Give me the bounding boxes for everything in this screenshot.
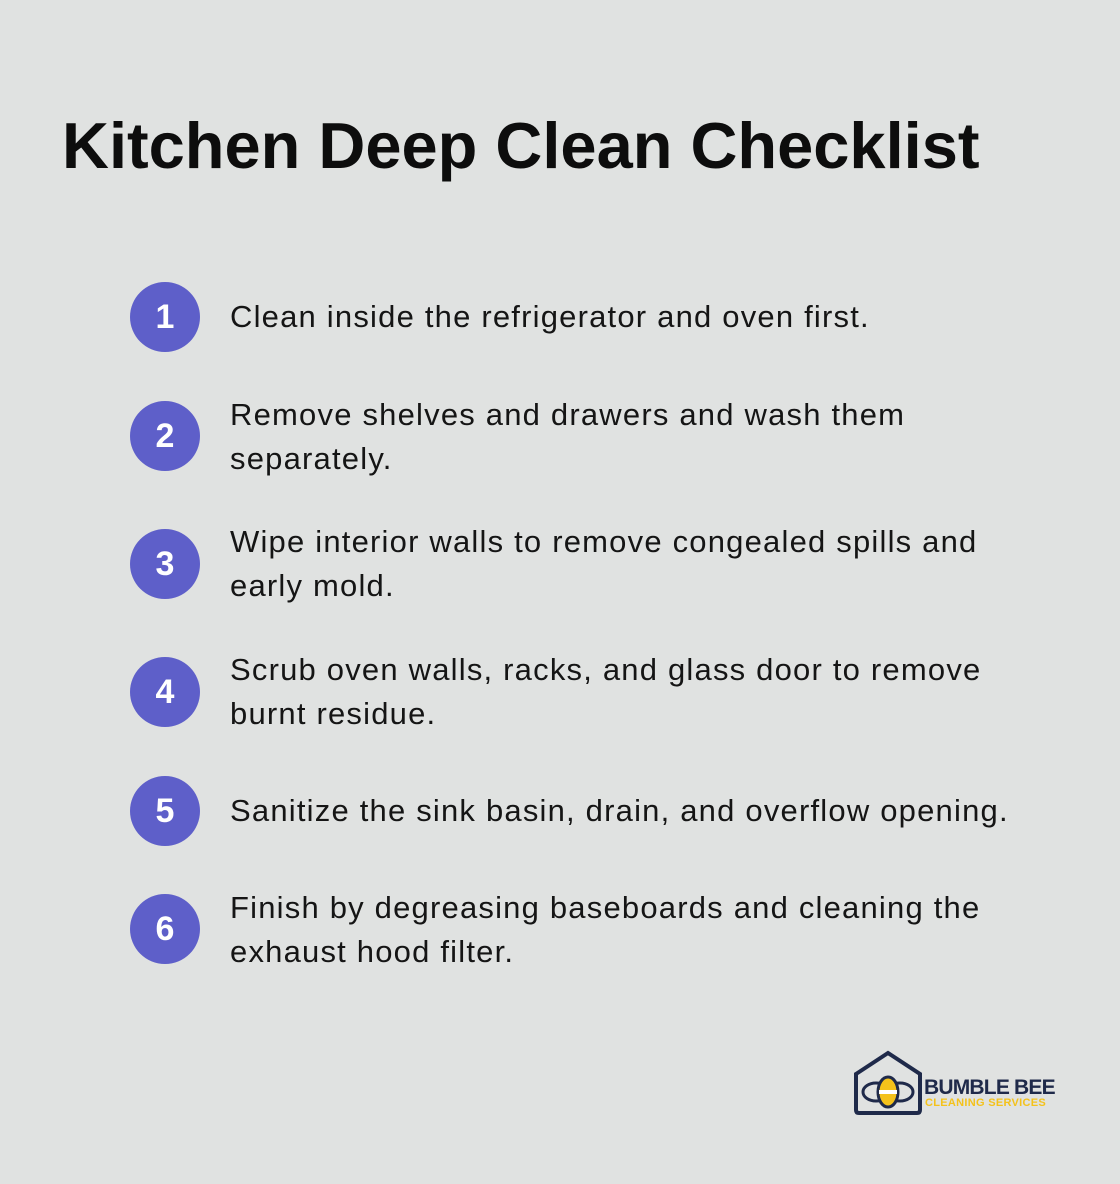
item 4: 4 <box>156 673 174 711</box>
item 1 <box>130 282 870 352</box>
title: Kitchen Deep Clean Checklist <box>62 109 980 182</box>
item 3: Wipe interior walls to remove congealed spills and <box>230 524 978 559</box>
item 5: 5 <box>156 792 174 830</box>
item 5 <box>130 776 1009 846</box>
item 6: exhaust hood filter. <box>230 934 514 969</box>
item 5: Sanitize the sink basin, drain, and overflow opening. <box>230 793 1009 828</box>
item 3: early mold. <box>230 568 395 603</box>
item 6 <box>130 890 980 969</box>
item 1: 1 <box>156 298 174 336</box>
logo text: BUMBLE BEE <box>924 1076 1055 1099</box>
item 2: separately. <box>230 441 393 476</box>
logo: CLEANING SERVICES <box>925 1097 1046 1109</box>
item 4: Scrub oven walls, racks, and glass door to remove <box>230 652 981 687</box>
item 4 <box>130 652 981 731</box>
item 6: Finish by degreasing baseboards and cleaning the <box>230 890 980 925</box>
item 6: 6 <box>156 910 174 948</box>
icon: bee house <box>854 1050 922 1115</box>
item 2 <box>130 397 905 476</box>
item 2: 2 <box>156 417 174 455</box>
item 3 <box>130 524 978 603</box>
item 3: 3 <box>156 545 174 583</box>
logo <box>854 1050 1055 1115</box>
item 1: Clean inside the refrigerator and oven first. <box>230 299 870 334</box>
item 2: Remove shelves and drawers and wash them <box>230 397 905 432</box>
item 4: burnt residue. <box>230 696 436 731</box>
